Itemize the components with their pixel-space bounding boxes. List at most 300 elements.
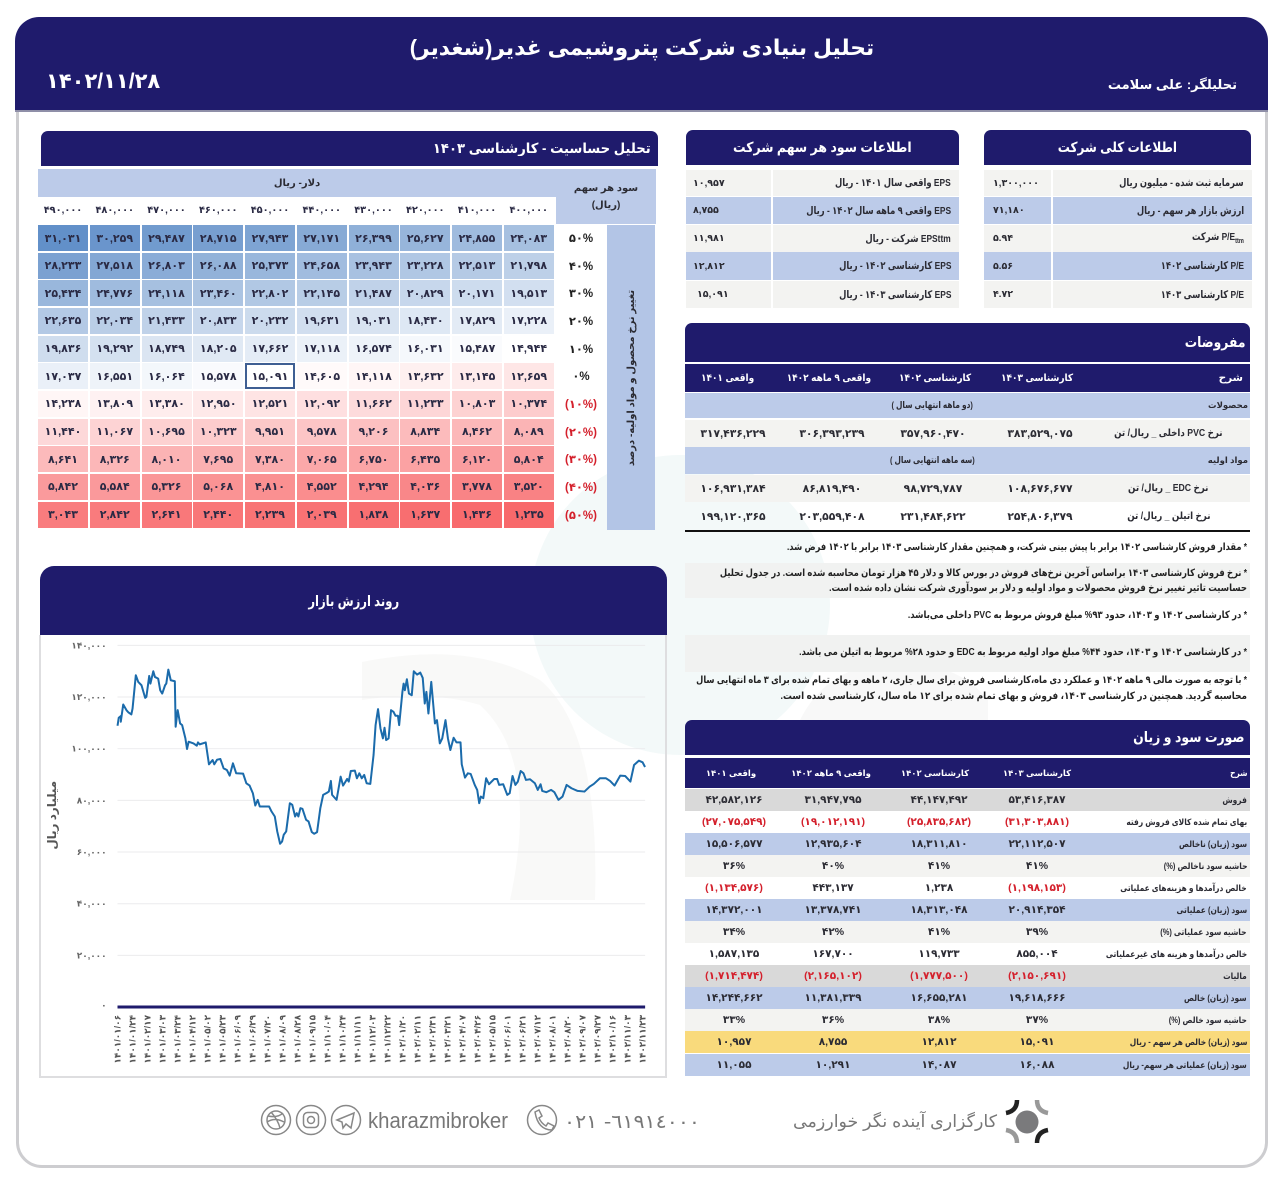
heat row -30%: ۵,۸۰۴	[514, 454, 544, 466]
heat row 40%: ۲۴,۶۵۸	[303, 260, 340, 272]
heat row -50%: ۱,۲۳۵	[514, 509, 544, 521]
income row: gross profit: ۱۲,۹۳۵,۶۰۴	[804, 838, 862, 850]
x axis date labels: ۱۴۰۱/۰۸/۲۸	[293, 1014, 303, 1064]
company info heading: اطلاعات کلی شرکت	[1058, 139, 1177, 155]
heat row 30%: ۲۰,۸۲۹	[407, 288, 444, 300]
income row: sales: ۵۳,۴۱۶,۳۸۷	[1008, 794, 1066, 806]
heat row 10%: ۱۶,۵۷۴	[355, 343, 392, 355]
income row: gross margin	[685, 855, 1250, 877]
percent axis labels: ۵۰%	[569, 233, 593, 245]
assumptions rule	[685, 530, 1250, 532]
heat row 10%: ۱۸,۷۴۹	[148, 343, 185, 355]
company row 3: P/Ettm شرکت	[1192, 231, 1244, 246]
heat row -50%: ۱,۸۳۸	[359, 509, 388, 521]
heat row -40%: ۳,۵۲۰	[514, 481, 544, 493]
heat row -10%: ۱۳,۳۸۰	[148, 398, 185, 410]
income row: cost of goods	[702, 816, 1247, 828]
heat row 30%: ۲۱,۴۸۷	[355, 288, 392, 300]
percent axis labels: (۲۰%)	[565, 427, 597, 439]
heat row 50%: ۲۸,۷۱۵	[200, 232, 237, 244]
percent axis labels: ۰%	[572, 371, 590, 383]
EDC row: ۹۸,۷۲۹,۷۸۷	[904, 483, 962, 495]
heat row 10%: ۱۷,۱۱۸	[303, 343, 340, 355]
note 1: * مقدار فروش کارشناسی ۱۴۰۲ برابر با پیش بینی شرکت، و همچنین مقدار کارشناسی ۱۴۰۳ برابر با ۱۴۰۲ فرض شد.	[787, 542, 1247, 553]
percent axis labels	[565, 233, 597, 522]
EDC row: ۸۶,۸۱۹,۴۹۰	[803, 483, 861, 495]
heat row -30%: ۸,۶۴۱	[48, 454, 78, 466]
income row: operating EPS: سود (زیان) عملیاتی هر سهم- ریال	[1123, 1060, 1247, 1070]
x axis date labels: ۱۴۰۲/۰۱/۲۰	[398, 1015, 408, 1064]
dollar rate band: دلار- ریال	[274, 178, 320, 188]
income column headers: کارشناسی ۱۴۰۳	[1003, 768, 1071, 778]
heat row 10%: ۱۵,۴۸۷	[459, 343, 495, 355]
income row: EPS: ۸,۷۵۵	[819, 1036, 847, 1048]
x axis date labels: ۱۴۰۱/۱۰/۰۴	[323, 1014, 333, 1064]
icon: instagram	[296, 1106, 326, 1134]
ethylene row: نرخ اتیلن _ ریال/ تن	[1127, 510, 1210, 522]
income row: EPS	[685, 1031, 1250, 1053]
percent axis labels: ۱۰%	[569, 344, 593, 356]
heat row -10%: ۱۲,۹۵۰	[200, 398, 237, 410]
income row: operating margin: ۴۲%	[822, 926, 844, 938]
panel: EPS info	[686, 130, 959, 308]
income row: operating EPS: ۱۰,۲۹۱	[816, 1059, 850, 1071]
company row 3	[984, 225, 1252, 252]
heat row 20%: ۱۷,۲۲۸	[510, 315, 547, 327]
dollar rate column headers: ۴۸۰,۰۰۰	[95, 204, 134, 216]
vertical axis label: تغییر نرخ محصول و مواد اولیه- درصد	[626, 290, 636, 466]
y axis ticks: ۰	[101, 1000, 107, 1010]
heat row 10%: ۱۹,۸۳۶	[45, 343, 81, 355]
income row: gross margin: ۴۰%	[822, 860, 844, 872]
EPS row 5: ۱۵,۰۹۱	[697, 289, 729, 300]
corner cell	[556, 169, 656, 224]
dollar rate column headers: ۴۶۰,۰۰۰	[199, 204, 238, 216]
y axis ticks: ۱۲۰,۰۰۰	[71, 692, 107, 702]
dollar rate column headers: ۴۹۰,۰۰۰	[44, 204, 82, 216]
EPS row 3	[686, 225, 959, 252]
percent axis labels: (۳۰%)	[565, 454, 597, 466]
company row 5: P/E کارشناسی ۱۴۰۳	[1161, 288, 1244, 300]
income row: other operating: ۴۴۳,۱۳۷	[812, 882, 854, 894]
heat row -10%	[38, 391, 554, 417]
note 4: * در کارشناسی ۱۴۰۲ و ۱۴۰۳، حدود ۴۴% مبلغ مواد اولیه مربوط به EDC و حدود ۲۸% مربوط به اتیلن می باشد.	[799, 647, 1247, 658]
x axis date labels: ۱۴۰۲/۰۲/۳۱	[428, 1015, 438, 1064]
income row: non-operating: ۱۱۹,۷۳۳	[918, 948, 960, 960]
x axis date labels	[112, 1014, 648, 1064]
income row: gross margin: ۴۱%	[1026, 860, 1048, 872]
heat row 0%: ۱۶,۵۵۱	[96, 371, 133, 383]
heat row 40%: ۲۶,۰۸۸	[200, 260, 237, 272]
heat row 0%: ۱۳,۱۴۵	[459, 371, 495, 383]
EPS heading	[686, 130, 959, 165]
x axis date labels: ۱۴۰۲/۰۹/۲۷	[593, 1014, 603, 1064]
EPS row 3: EPSttm شرکت - ریال	[866, 232, 951, 244]
y axis ticks	[71, 640, 107, 1010]
income row: tax: (۲,۱۶۵,۱۰۲)	[804, 970, 862, 982]
heat row 10%: ۱۷,۶۶۲	[252, 343, 288, 355]
sensitivity heading: تحلیل حساسیت - کارشناسی ۱۴۰۳	[433, 140, 651, 156]
company row 2	[984, 197, 1252, 224]
heat row 10%: ۱۶,۰۳۱	[407, 343, 444, 355]
income row: other operating: ۱,۲۳۸	[925, 882, 953, 894]
x axis date labels: ۱۴۰۱/۰۹/۱۵	[308, 1014, 318, 1064]
corner cell: سود هر سهم	[574, 183, 638, 194]
heat row -10%: ۱۰,۸۰۳	[459, 398, 495, 410]
heat row -40%: ۴,۲۹۴	[359, 481, 388, 493]
heat row 30%: ۲۲,۸۰۲	[252, 288, 288, 300]
company info heading	[984, 130, 1251, 165]
x axis date labels: ۱۴۰۲/۰۸/۲۰	[563, 1015, 573, 1064]
heat row 10%: ۱۴,۹۴۴	[510, 343, 547, 355]
heat row -10%: ۱۰,۳۷۴	[510, 398, 547, 410]
footer	[260, 1100, 1048, 1143]
heat row 30%: ۲۳,۴۶۰	[200, 288, 237, 300]
icon: dribbble	[262, 1106, 290, 1134]
x axis date labels: ۱۴۰۲/۰۲/۱۱	[413, 1015, 423, 1064]
heat row -30%	[38, 446, 554, 472]
header banner	[15, 17, 1268, 112]
heat row 50%: ۲۹,۴۸۷	[148, 232, 185, 244]
corner cell: (ریال)	[592, 200, 620, 211]
ethylene row: ۲۳۱,۴۸۴,۶۲۲	[900, 510, 966, 522]
note 5: * با توجه به صورت مالی ۹ ماهه ۱۴۰۲ و عملکرد دی ماه،کارشناسی فروش برای سال جاری، ۲ ماهه و بهای تمام شده برای ۳ ماه انتهایی سال	[696, 675, 1247, 686]
company row 4	[984, 252, 1252, 280]
heat row -10%: ۱۳,۸۰۹	[96, 398, 133, 410]
income column headers	[685, 758, 1250, 788]
income row: tax: مالیات	[1223, 970, 1247, 980]
heat row -30%: ۶,۱۲۰	[462, 454, 492, 466]
income row: tax	[685, 965, 1250, 987]
heat row 10%	[38, 336, 547, 362]
dollar rate column headers: ۴۷۰,۰۰۰	[147, 204, 186, 216]
dollar rate column headers: ۴۳۰,۰۰۰	[354, 204, 393, 216]
assumptions heading: مفروضات	[1184, 334, 1245, 350]
heat row 20%: ۲۲,۰۳۴	[96, 315, 133, 327]
heat row 0%: ۱۴,۶۰۵	[303, 371, 340, 383]
title: تحلیل بنیادی شرکت پتروشیمی غدیر(شغدیر)	[410, 35, 874, 60]
income row: EPS: ۱۲,۸۱۲	[922, 1036, 956, 1048]
heat row 50%: ۲۴,۰۸۳	[510, 232, 547, 244]
heat row -40%: ۵,۵۸۴	[100, 481, 130, 493]
heat row 40%: ۲۳,۲۲۸	[407, 260, 444, 272]
income statement heading	[685, 720, 1250, 755]
income row: other operating: خالص درآمدها و هزینه‌های عملیاتی	[1121, 882, 1247, 892]
income row: net profit: ۱۴,۲۴۴,۶۶۲	[705, 992, 763, 1004]
y axis ticks: ۶۰,۰۰۰	[77, 847, 107, 857]
income row: sales: فروش	[1222, 794, 1247, 804]
x axis date labels: ۱۴۰۲/۰۶/۰۱	[503, 1015, 513, 1064]
income row: operating EPS: ۱۶,۰۸۸	[1020, 1059, 1054, 1071]
x axis date labels: ۱۴۰۲/۱۰/۱۶	[608, 1015, 618, 1064]
heat row -10%: ۱۲,۰۹۲	[303, 398, 340, 410]
x axis date labels: ۱۴۰۱/۰۵/۲۳	[218, 1014, 228, 1064]
heat row -50%: ۱,۴۳۶	[462, 509, 492, 521]
income row: non-operating: ۱,۵۸۷,۱۳۵	[709, 948, 759, 960]
notes block	[814, 563, 1250, 672]
income row: operating margin: ۳۴%	[723, 926, 745, 938]
heat row 40%: ۲۶,۸۰۳	[148, 260, 185, 272]
heat row 20%: ۱۷,۸۲۹	[459, 315, 495, 327]
heat row -40%: ۴,۸۱۰	[255, 481, 285, 493]
heat row 0%: ۱۵,۵۷۸	[200, 371, 237, 383]
x axis date labels: ۱۴۰۲/۱۱/۰۳	[623, 1014, 633, 1064]
income row: net margin: ۳۸%	[928, 1014, 950, 1026]
heat row 30%: ۲۰,۱۷۱	[459, 288, 495, 300]
company row 1: ۱,۳۰۰,۰۰۰	[993, 178, 1039, 188]
products band: (دو ماهه انتهایی سال )	[891, 400, 973, 411]
income row: non-operating: ۱۶۷,۷۰۰	[812, 948, 854, 960]
EPS row 2: ۸,۷۵۵	[693, 205, 719, 216]
x axis date labels: ۱۴۰۲/۰۷/۱۲	[533, 1014, 543, 1064]
ethylene row: ۲۰۳,۵۵۹,۴۰۸	[799, 510, 865, 522]
heat row -30%: ۷,۳۸۰	[255, 454, 285, 466]
income row: gross profit: سود (زیان) ناخالص	[1179, 838, 1247, 848]
raw materials band	[685, 447, 1250, 474]
heat row -40%	[38, 474, 554, 500]
income row: other operating: (۱,۱۹۸,۱۵۳)	[1008, 882, 1066, 894]
heat row 40%: ۲۲,۵۱۳	[459, 260, 495, 272]
heat row -20%	[38, 419, 554, 445]
PVC row	[685, 420, 1250, 447]
y axis ticks: ۱۰۰,۰۰۰	[71, 744, 107, 754]
income row: cost of goods: (۱۹,۰۱۲,۱۹۱)	[801, 816, 865, 828]
heat row 40%: ۲۷,۵۱۸	[96, 260, 133, 272]
ethylene row: ۱۹۹,۱۲۰,۳۶۵	[700, 510, 766, 522]
company row 1	[984, 170, 1252, 196]
heat row 50%: ۳۱,۰۳۱	[45, 232, 81, 244]
zero axis line	[118, 1006, 645, 1009]
heat row 20%	[38, 308, 554, 334]
income row: non-operating	[709, 948, 1247, 960]
income row: net profit: سود (زیان) خالص	[1184, 992, 1247, 1002]
income row: net margin	[685, 1009, 1250, 1031]
assumptions column headers	[685, 364, 1250, 392]
income row: gross profit: ۲۲,۱۱۲,۵۰۷	[1008, 838, 1066, 850]
EDC row: نرخ EDC _ ریال/ تن	[1128, 483, 1209, 494]
income column headers: شرح	[1230, 768, 1247, 778]
income row: operating margin: ۴۱%	[928, 926, 950, 938]
income row: cost of goods: (۳۱,۳۰۳,۸۸۱)	[1005, 816, 1069, 828]
income row: other operating: (۱,۱۳۴,۵۷۶)	[705, 882, 763, 894]
heat row 40%: ۲۳,۹۴۳	[355, 260, 392, 272]
assumptions column headers: واقعی ۱۴۰۱	[701, 372, 755, 384]
heat row 30%	[38, 280, 554, 306]
heat row -40%: ۵,۰۶۸	[203, 481, 233, 493]
sensitivity heading	[41, 131, 658, 166]
assumptions column headers: واقعی ۹ ماهه ۱۴۰۲	[787, 372, 871, 384]
heat row 20%: ۱۹,۶۳۱	[303, 315, 340, 327]
income row: sales: ۴۴,۱۴۷,۴۹۲	[910, 794, 968, 806]
x axis date labels: ۱۴۰۱/۰۶/۲۹	[248, 1014, 258, 1064]
income row: sales: ۳۱,۹۴۷,۷۹۵	[804, 794, 862, 806]
income row: operating margin: حاشیه سود عملیاتی (%)	[1161, 926, 1247, 936]
heat row -20%: ۱۰,۶۹۵	[148, 426, 185, 438]
income row: tax: (۱,۷۷۷,۵۰۰)	[910, 970, 968, 982]
percent axis labels: ۴۰%	[569, 261, 593, 273]
income row: net profit	[685, 987, 1250, 1009]
dollar rate column headers	[44, 204, 548, 216]
heat row 50%: ۲۷,۹۴۳	[252, 232, 288, 244]
icon: company logo	[1006, 1100, 1048, 1143]
social handle: kharazmibroker	[368, 1108, 508, 1133]
heat row 50%: ۲۴,۸۵۵	[459, 232, 495, 244]
EPS row 4: EPS کارشناسی ۱۴۰۲ - ریال	[839, 260, 951, 272]
x axis date labels: ۱۴۰۱/۰۵/۰۲	[203, 1014, 213, 1064]
note band 2	[685, 563, 1250, 598]
heat row -20%: ۹,۲۰۶	[359, 426, 388, 438]
PVC row: نرخ PVC داخلی _ ریال/ تن	[1114, 428, 1223, 439]
income row: EPS: ۱۰,۹۵۷	[717, 1036, 751, 1048]
heat row -30%: ۶,۷۵۰	[359, 454, 388, 466]
panel: company info	[984, 130, 1252, 308]
income row: tax: (۲,۱۵۰,۶۹۱)	[1008, 970, 1066, 982]
date: ۱۴۰۲/۱۱/۲۸	[46, 70, 160, 93]
x axis date labels: ۱۴۰۲/۰۵/۱۵	[488, 1014, 498, 1064]
company row 5: ۴.۷۲	[993, 289, 1013, 300]
heat row -20%: ۸,۴۶۲	[462, 426, 492, 438]
income row: net margin: حاشیه سود خالص (%)	[1169, 1014, 1247, 1024]
income row: net margin: ۳۷%	[1026, 1014, 1048, 1026]
income row: operating EPS: ۱۱,۰۵۵	[717, 1059, 751, 1071]
dollar rate column headers: ۴۲۰,۰۰۰	[406, 204, 445, 216]
x axis date labels: ۱۴۰۱/۰۳/۲۴	[173, 1014, 183, 1064]
income row: non-operating: خالص درآمدها و هزینه های غیرعملیاتی	[1106, 948, 1247, 958]
PVC row: ۳۰۶,۳۹۳,۲۳۹	[799, 428, 865, 440]
income row: operating profit	[685, 899, 1250, 921]
income row: operating profit: سود (زیان) عملیاتی	[1176, 904, 1247, 914]
EPS row 4	[686, 252, 959, 280]
income row: gross margin: ۴۱%	[928, 860, 950, 872]
heat row 40%: ۲۱,۷۹۸	[510, 260, 547, 272]
income row: operating margin: ۳۹%	[1026, 926, 1048, 938]
note band 4	[685, 635, 1250, 672]
heat row 0%: ۱۶,۰۶۴	[148, 371, 185, 383]
heat row -40%: ۵,۸۴۲	[48, 481, 78, 493]
heat row 0%: ۱۳,۶۳۲	[407, 371, 444, 383]
heat row 50%: ۲۶,۳۹۹	[355, 232, 392, 244]
income row: net margin: ۳۳%	[723, 1014, 745, 1026]
products band: محصولات	[1208, 400, 1248, 410]
income row: net profit: ۱۱,۳۸۱,۳۳۹	[804, 992, 862, 1004]
heat row -30%: ۶,۴۳۵	[410, 454, 440, 466]
x axis date labels: ۱۴۰۲/۰۸/۰۱	[548, 1015, 558, 1064]
income statement heading: صورت سود و زیان	[1134, 730, 1245, 746]
market value chart heading: روند ارزش بازار	[308, 594, 399, 610]
income row: sales	[685, 789, 1250, 811]
heat row 0%: ۱۴,۱۱۸	[355, 371, 392, 383]
x axis date labels: ۱۴۰۱/۰۱/۰۶	[112, 1015, 122, 1064]
raw materials band: (سه ماهه انتهایی سال )	[890, 455, 974, 466]
PVC row: ۳۱۷,۴۳۶,۲۲۹	[700, 428, 766, 440]
heat row -10%: ۱۱,۲۳۳	[407, 398, 444, 410]
heat row 10%: ۱۸,۲۰۵	[200, 343, 237, 355]
note 2: * نرخ فروش کارشناسی ۱۴۰۳ براساس آخرین نرخ‌های فروش در بورس کالا و دلار ۴۵ هزار تومان محاسبه شده است. در جدول تحلیل	[720, 568, 1247, 578]
income row: other operating	[705, 882, 1247, 894]
heat row -40%: ۵,۳۲۶	[152, 481, 181, 493]
heat row 0%: ۱۵,۰۹۱	[252, 371, 288, 383]
income row: net margin: ۳۶%	[822, 1014, 844, 1026]
EPS row 4: ۱۲,۸۱۲	[693, 260, 725, 272]
x axis date labels: ۱۴۰۱/۰۴/۱۲	[188, 1014, 198, 1064]
EPS row 1	[686, 170, 959, 196]
ethylene row	[700, 510, 1210, 522]
income row: net profit: ۱۹,۶۱۸,۶۶۶	[1008, 992, 1066, 1004]
heat row 40%: ۲۵,۳۷۳	[252, 260, 288, 272]
assumptions column headers: کارشناسی ۱۴۰۳	[1001, 372, 1073, 384]
income row: tax: (۱,۷۱۴,۴۷۴)	[705, 970, 763, 982]
heat row -10%: ۱۱,۶۶۲	[355, 398, 392, 410]
y axis ticks: ۱۴۰,۰۰۰	[71, 640, 107, 650]
income row: operating EPS	[685, 1054, 1250, 1076]
heat row -50%: ۲,۴۴۰	[203, 509, 233, 521]
PVC row: ۳۸۳,۵۲۹,۰۷۵	[1007, 428, 1073, 440]
market value line chart	[39, 635, 667, 1078]
x axis date labels: ۱۴۰۱/۰۸/۰۹	[278, 1014, 288, 1064]
heat row 30%: ۲۲,۱۴۵	[303, 288, 340, 300]
x axis date labels: ۱۴۰۱/۱۰/۲۴	[338, 1014, 348, 1064]
ethylene row: ۲۵۴,۸۰۶,۳۷۹	[1007, 510, 1073, 522]
percent axis labels: ۲۰%	[569, 316, 593, 328]
heat row 40%: ۲۸,۲۳۳	[45, 260, 81, 272]
percent axis labels: ۳۰%	[569, 288, 593, 300]
brokerage name: کارگزاری آینده نگر خوارزمی	[793, 1110, 998, 1131]
heat row -50%: ۲,۶۴۱	[152, 509, 181, 521]
heat row 50%: ۲۵,۶۲۷	[407, 232, 444, 244]
heat row -20%: ۱۱,۰۶۷	[96, 426, 133, 438]
heat row -40%: ۴,۰۳۶	[410, 481, 440, 493]
x axis date labels: ۱۴۰۱/۰۱/۲۴	[127, 1014, 137, 1064]
note 2: حساسیت تاثیر تغییر نرخ فروش محصولات و مواد اولیه و دلار بر سودآوری شرکت نشان داده شده است.	[829, 582, 1247, 594]
company row 4: ۵.۵۶	[993, 260, 1013, 272]
EPS heading: اطلاعات سود هر سهم شرکت	[733, 139, 912, 155]
income row: gross profit: ۱۵,۵۰۶,۵۷۷	[705, 838, 763, 850]
heat row -50%: ۲,۲۳۹	[255, 509, 285, 521]
company row 1: سرمایه ثبت شده - میلیون ریال	[1120, 177, 1244, 189]
panel: sensitivity analysis	[38, 131, 658, 530]
EPS row 3: ۱۱,۹۸۱	[693, 233, 725, 244]
dollar rate band	[38, 169, 556, 197]
heat row -20%: ۱۰,۳۲۳	[200, 426, 237, 438]
PVC row: ۳۵۷,۹۶۰,۴۷۰	[900, 428, 966, 440]
note 3: * در کارشناسی ۱۴۰۲ و ۱۴۰۳، حدود ۹۳% مبلغ فروش مربوط به PVC داخلی می‌باشد.	[908, 610, 1247, 621]
heat row -50%	[38, 502, 554, 528]
income row: gross margin: حاشیه سود ناخالص (%)	[1163, 860, 1247, 870]
dollar rate column headers: ۴۱۰,۰۰۰	[458, 204, 496, 216]
note 5	[696, 675, 1247, 702]
EDC row: ۱۰۶,۹۳۱,۳۸۴	[700, 483, 766, 495]
dollar rate column headers: ۴۰۰,۰۰۰	[509, 204, 548, 216]
heat row 20%: ۲۰,۸۳۳	[200, 315, 237, 327]
heat row 20%: ۱۹,۰۳۱	[355, 315, 392, 327]
x axis date labels: ۱۴۰۱/۰۷/۲۰	[263, 1015, 273, 1064]
heat row 20%: ۲۲,۶۳۵	[45, 315, 81, 327]
income row: gross profit	[685, 833, 1250, 855]
market value series	[118, 670, 645, 844]
x axis date labels: ۱۴۰۱/۱۱/۱۱	[353, 1015, 363, 1064]
EPS row 5: EPS کارشناسی ۱۴۰۳ - ریال	[839, 288, 951, 300]
products band	[685, 393, 1250, 418]
vertical axis band	[607, 225, 655, 530]
percent axis labels: (۴۰%)	[565, 482, 597, 494]
x axis date labels: ۱۴۰۱/۰۳/۰۳	[158, 1014, 168, 1064]
x axis date labels: ۱۴۰۲/۱۱/۲۳	[638, 1014, 648, 1064]
income row: operating EPS: ۱۴,۰۸۷	[922, 1059, 956, 1071]
raw materials band: مواد اولیه	[1208, 455, 1248, 465]
company row 5	[984, 281, 1252, 308]
note 5: محاسبه گردید. همچنین در کارشناسی ۱۴۰۳، فروش و بهای تمام شده برای ۱۲ ماه سال، کارشناسی شده است.	[781, 691, 1247, 702]
heat row 30%: ۱۹,۵۱۳	[510, 288, 547, 300]
